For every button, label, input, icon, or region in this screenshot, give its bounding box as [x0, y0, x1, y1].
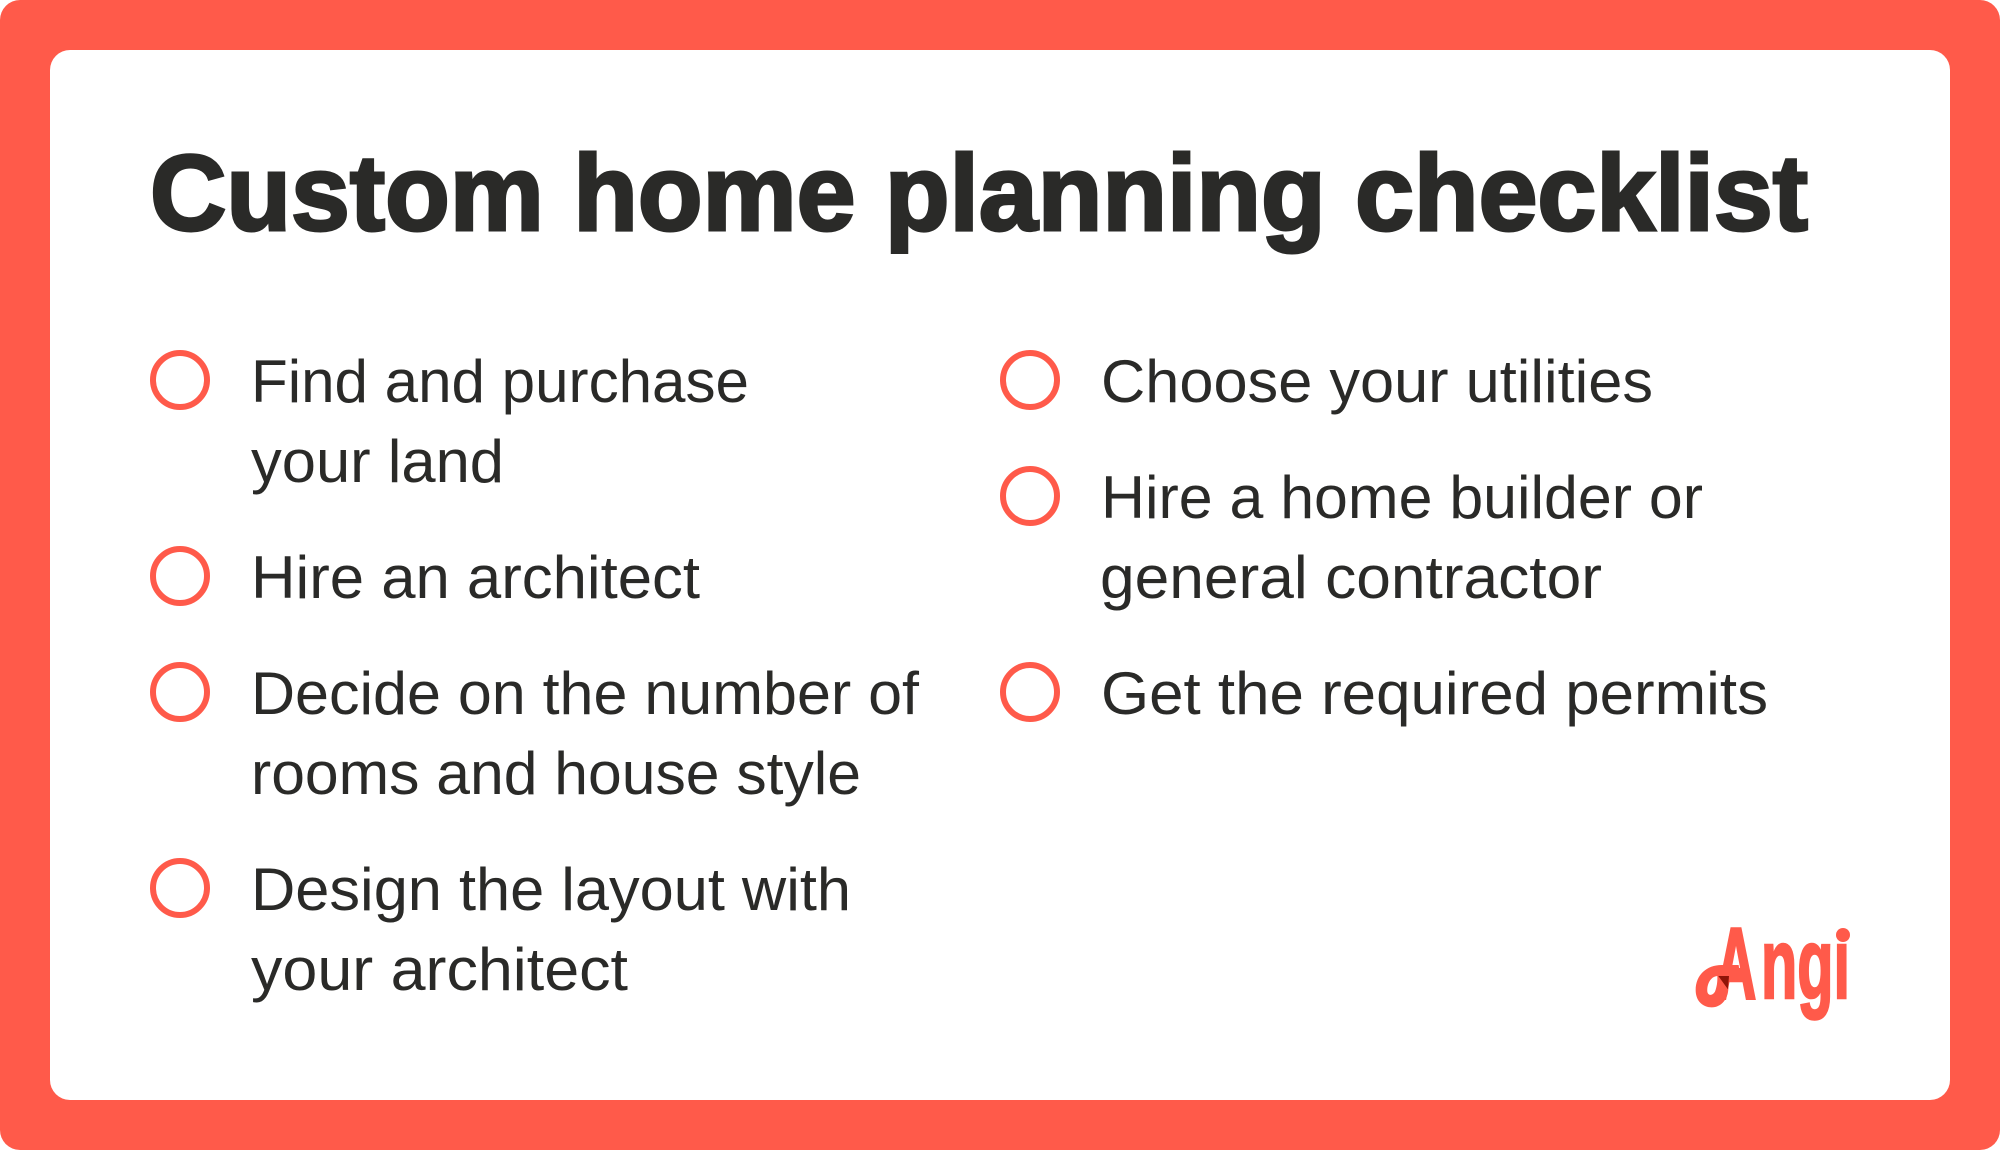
checklist item: rooms and style: [153, 660, 919, 807]
checklist item: rooms and style: rooms and house style: [251, 740, 861, 807]
checklist item: hire builder: general contractor: [1100, 544, 1602, 611]
title: Custom home planning checklist: [150, 132, 1808, 253]
checklist item: design layout: [153, 856, 851, 1003]
logo: Angi: [1696, 908, 1854, 1020]
checklist item: permits: Get the required permits: [1101, 660, 1768, 727]
checklist item: design layout: Design the layout with: [251, 856, 851, 923]
checklist item: find land: your land: [251, 428, 504, 495]
logo: Angi: ngi: [1761, 908, 1850, 1020]
checklist item: design layout: your architect: [251, 936, 628, 1003]
checklist item: find land: [153, 348, 749, 495]
checklist item: utilities: Choose your utilities: [1101, 348, 1653, 415]
checklist item: hire builder: [1003, 464, 1703, 611]
checklist item: find land: Find and purchase: [251, 348, 749, 415]
checklist item: rooms and style: Decide on the number of: [251, 660, 919, 727]
checklist item: hire architect: Hire an architect: [251, 544, 700, 611]
checklist item: hire builder: Hire a home builder or: [1101, 464, 1703, 531]
logo: Angi: A: [1716, 908, 1756, 1020]
